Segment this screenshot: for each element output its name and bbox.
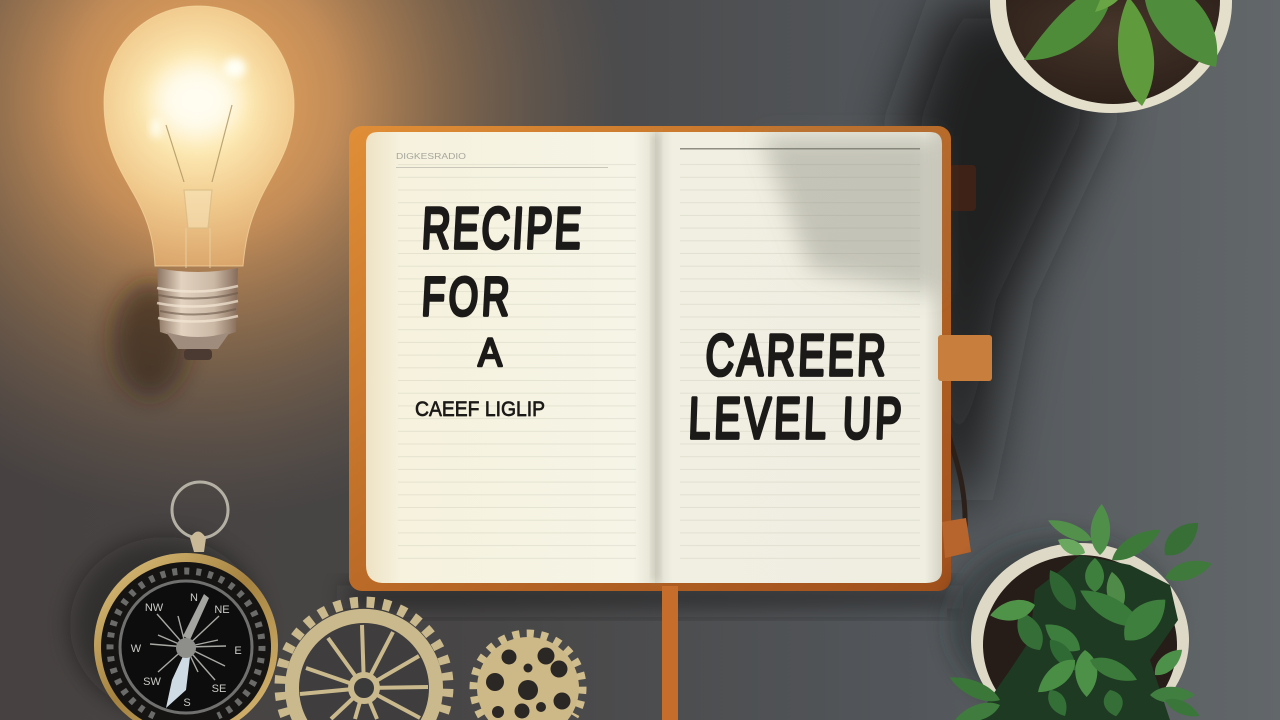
small gear holes: [486, 648, 570, 718]
gear teeth: [280, 602, 448, 716]
RECIPE: RECIPE: [420, 195, 585, 261]
gear hub: [351, 675, 377, 701]
notebook: [349, 126, 992, 720]
title text: right page: [688, 322, 906, 451]
lightbulb shadow: [112, 282, 188, 398]
gear spokes: [300, 625, 428, 719]
small gear teeth: [474, 634, 582, 716]
notebook cover: [349, 126, 951, 591]
pen loop: [942, 518, 971, 558]
small garbled line: CAEEF LIGLIP: [415, 398, 545, 421]
gear rim: [285, 609, 443, 720]
bookmark ribbon: [662, 586, 678, 720]
icon: plant top right: [990, 0, 1232, 113]
pen loop cord: [946, 425, 965, 540]
leaves: [1024, 0, 1108, 60]
compass labels: N: [190, 592, 198, 604]
compass stem: [190, 532, 206, 552]
compass labels: SW: [143, 676, 161, 688]
CAREER: CAREER: [705, 322, 890, 388]
left page: [366, 132, 657, 583]
compass shadow: [70, 537, 260, 713]
compass labels: NW: [145, 602, 164, 614]
A: A: [478, 331, 503, 375]
elastic clasp: [938, 335, 992, 381]
soil: [1006, 0, 1220, 104]
pot shadow: [950, 537, 1170, 713]
compass labels: W: [131, 643, 142, 655]
icon: lightbulb: [104, 6, 294, 360]
icon: large gear: [280, 602, 448, 720]
bulb glass: [104, 6, 294, 266]
page shadow: [760, 136, 938, 295]
spine shadow: [652, 134, 660, 581]
small header on left page: DIGKESRADIO: [396, 151, 466, 161]
compass labels: NE: [214, 604, 230, 616]
dark strap tab: [950, 165, 976, 211]
icon: small gear: [474, 634, 582, 720]
pot: [990, 0, 1232, 113]
bulb screw base: [157, 268, 238, 360]
compass rays: [150, 614, 226, 680]
FOR: FOR: [420, 266, 515, 327]
LEVEL UP: LEVEL UP: [688, 385, 906, 451]
title text: left page: [415, 195, 585, 421]
compass body: [94, 553, 278, 720]
compass labels: SE: [212, 683, 226, 695]
icon: compass: [70, 482, 278, 720]
right page: [655, 132, 942, 583]
pot: [971, 543, 1189, 720]
bulb filament: [166, 105, 232, 268]
gear centre opening: [299, 623, 429, 720]
leaves: [946, 504, 1214, 720]
soil: [983, 555, 1177, 720]
notebook cast shadow: [345, 0, 1100, 609]
compass ring: [172, 482, 228, 538]
compass labels: S: [183, 697, 191, 709]
foliage mass: [975, 555, 1178, 720]
icon: plant bottom right: [946, 504, 1214, 720]
compass needle: [183, 594, 209, 640]
compass labels: E: [234, 645, 242, 657]
small gear body: [477, 637, 579, 720]
bulb highlights: [150, 58, 246, 138]
compass labels: [131, 592, 242, 709]
bulb glow core: [155, 64, 239, 136]
